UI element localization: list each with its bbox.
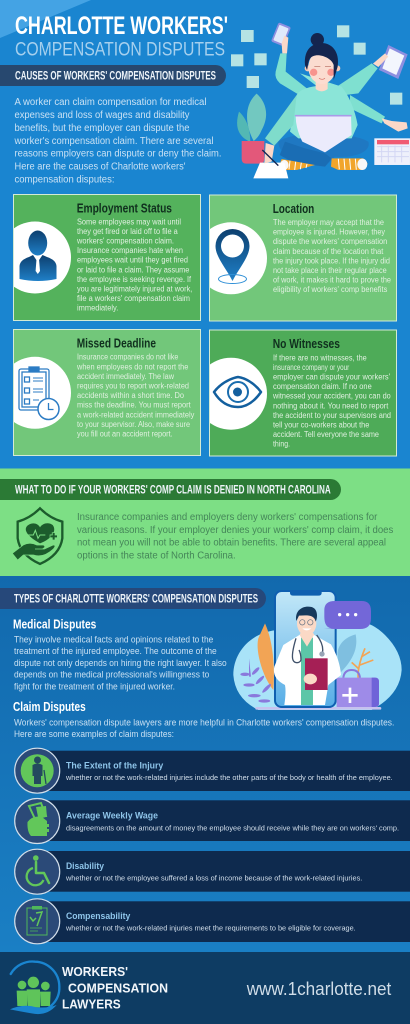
text block: options in the state of North Carolina. [77, 550, 236, 561]
panel: header background [0, 0, 410, 469]
heading: TYPES OF CHARLOTTE WORKERS' COMPENSATION DISPUTES [14, 594, 258, 606]
text block: medical: fight for the treatment of the injured worker. [14, 682, 175, 692]
title [15, 12, 228, 60]
text block: miss the deadline. You must report [77, 401, 191, 410]
intro text: reasons employers can dispute or deny the claim. [14, 148, 222, 160]
heading: causes [0, 65, 226, 86]
panel: footer [0, 952, 410, 1024]
text block: tell your co-workers about the [273, 420, 370, 430]
label: Compensability [66, 911, 131, 922]
logo text: LAWYERS [62, 997, 121, 1011]
text block: thing. [273, 440, 290, 449]
row: compensability [15, 899, 410, 944]
text block: the injury took place. If the injury did [273, 256, 390, 265]
row: average weekly wage [15, 798, 410, 844]
text block: not mean you will not be able to obtain benefits. There are several appeal [77, 538, 386, 549]
row: disability [15, 849, 410, 894]
text block: Insurance companies hate when [77, 246, 183, 255]
illustration: doctor on phone [233, 591, 402, 710]
title: CHARLOTTE WORKERS' [15, 12, 228, 40]
logo [10, 962, 59, 1014]
text block: claim: Workers' compensation dispute lawyers are more helpful in Charlotte workers' compensation disputes. [14, 717, 394, 727]
icon: clipboard [15, 899, 60, 944]
text block: employees wait until they get fired [77, 256, 188, 265]
text block: accident. Tell everyone the same [273, 430, 379, 439]
heading: No Witnesses [273, 336, 340, 351]
row: extent of the injury [15, 748, 410, 793]
text block: various reasons. If your employer denies your workers' comp claim, it does [77, 525, 393, 536]
description: whether or not the work-related injuries include the other parts of the body or health of the employee. [65, 773, 393, 782]
heading: causes: CAUSES OF WORKERS' COMPENSATION DISPUTES [15, 70, 216, 82]
text block: claim [14, 717, 394, 739]
logo text: COMPENSATION [68, 981, 168, 995]
text block [272, 353, 391, 449]
text block: you fill out an accident report. [77, 430, 173, 438]
text block [76, 353, 194, 438]
panel: missed deadline [0, 330, 200, 456]
intro text: Here are the causes of Charlotte workers' [14, 162, 186, 172]
label: Average Weekly Wage [66, 810, 158, 821]
icon: employee [14, 222, 71, 294]
text block: The employer may accept that the [273, 218, 385, 227]
text block: Some employees may wait until [77, 217, 181, 226]
text block: dispute the workers' compensation [273, 237, 387, 246]
text block: you are legitimately injured at work, [77, 284, 192, 294]
text block [77, 512, 393, 561]
icon: eye [210, 358, 267, 430]
website: www.1charlotte.net [246, 979, 391, 999]
icon: map pin [210, 222, 267, 294]
icon: hand with money [15, 798, 60, 844]
text block: claim because of the location that [273, 247, 384, 256]
heading: Location [273, 201, 314, 216]
text block [76, 217, 192, 313]
description: whether or not the work-related injuries meet the requirements to be eligible for coverage. [65, 924, 356, 933]
text block: employer can dispute your workers' [273, 372, 390, 382]
logo text [62, 965, 168, 1011]
icon: checklist and clock [14, 356, 71, 429]
text block: medical: dispute not only depends on hiring the right lawyer. It also [14, 658, 227, 668]
text block: medical [14, 634, 227, 692]
text block: witnessed your accident, you can do [272, 392, 391, 401]
heading: Missed Deadline [77, 335, 156, 350]
panel: employment status [0, 194, 200, 320]
text block: when employees do not report the [76, 362, 189, 371]
text block: accident immediately. The law [77, 372, 174, 381]
text block: they get fired or laid off to file a [77, 227, 178, 236]
text block: medical: They involve medical facts and opinions related to the [14, 634, 213, 644]
text block: compensation claim. If no one [273, 382, 372, 391]
icon: injured person [15, 748, 60, 793]
label: Disability [66, 861, 105, 872]
text block: Insurance companies and employers deny workers' compensations for [77, 512, 378, 523]
heading [0, 588, 266, 609]
intro text: worker's compensation claim. There are several [14, 136, 214, 147]
intro text: benefits, but the employer can dispute the [14, 123, 190, 134]
text block: to your supervisor. Also, make sure [77, 420, 190, 429]
text block: eligibility of workers' comp benefits [273, 285, 387, 294]
panel: no witnesses [195, 330, 396, 456]
heading [0, 479, 341, 500]
text block: nothing about it. You need to report [273, 401, 389, 410]
text block [273, 218, 391, 294]
text block: the accident to your supervisors and [273, 411, 391, 420]
text block: immediately. [77, 304, 118, 313]
text block: the employee is seeking revenge. If [77, 275, 192, 284]
text block: not take place in their regular place [273, 266, 387, 275]
intro text: A worker can claim compensation for medical [14, 97, 206, 108]
heading: medical disputes: Medical Disputes [13, 617, 96, 632]
text block: claim: Here are some examples of claim disputes: [14, 729, 174, 739]
intro text [14, 97, 222, 186]
intro text: compensation disputes: [14, 174, 114, 186]
label: The Extent of the Injury [66, 761, 164, 772]
text block: Insurance companies do not like [77, 353, 179, 362]
text block: insurance company or your [273, 363, 350, 372]
text block: medical: treatment of the injured employee. The outcome of the [14, 646, 217, 656]
text block: file a workers' compensation claim [77, 294, 190, 303]
text block: medical: depends on the medical professional's willingness to [14, 670, 209, 680]
description: whether or not the employee suffered a loss of income because of the work-related injuries. [65, 874, 362, 883]
heading: Employment Status [77, 200, 172, 215]
text block: a work-related accident immediately [77, 410, 194, 419]
title: COMPENSATION DISPUTES [15, 40, 225, 60]
heading: claim disputes: Claim Disputes [13, 699, 86, 714]
illustration: multitasking woman [231, 22, 410, 178]
text block: employee is injured. However, they [273, 228, 385, 237]
text block: requires you to report work-related [77, 382, 189, 390]
text block: workers' compensation claim. [76, 236, 174, 246]
panel: location [195, 195, 396, 321]
text block: If there are no witnesses, the [273, 353, 367, 362]
logo text: WORKERS' [62, 965, 128, 979]
description: disagreements on the amount of money the employee should receive while they are on workers' comp. [66, 823, 399, 832]
text block: of work, it makes it hard to prove the [273, 276, 391, 285]
text block: or laid to file a claim. They assume [77, 265, 190, 274]
icon: shield with heart [12, 508, 62, 564]
intro text: expenses and loss of wages and disability [14, 110, 190, 121]
icon: wheelchair [15, 849, 60, 894]
panel: types of disputes [0, 576, 410, 952]
text block: accidents within a short time. Do [77, 391, 185, 400]
panel: what to do if denied [0, 468, 410, 576]
